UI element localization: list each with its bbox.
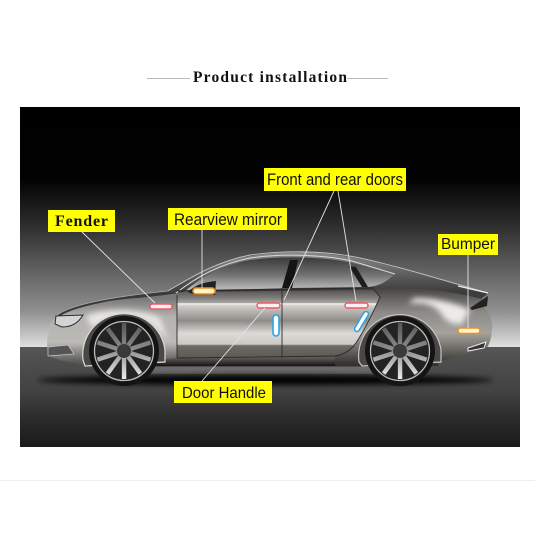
sticker: rear door edge blue inner [357, 314, 366, 329]
label: Fender [48, 210, 115, 232]
panel: car photo [20, 107, 520, 447]
front wheel arch [83, 314, 165, 366]
rear wheel arch [359, 315, 441, 366]
side windows [184, 257, 394, 292]
roof and rear deck [168, 252, 488, 300]
footer divider [0, 480, 535, 482]
label: Bumper: Bumper [441, 236, 496, 253]
fender highlight [86, 310, 168, 340]
rear quarter highlight [408, 298, 470, 324]
sticker: bumper amber [458, 328, 480, 334]
rear quarter panel [335, 289, 492, 366]
car shadow [37, 375, 493, 385]
headlight [55, 315, 83, 327]
tail bright spoiler [458, 286, 488, 293]
title: Product installation [193, 69, 347, 86]
mirror housing [188, 281, 216, 295]
floor highlight under car [150, 367, 380, 374]
roofline highlight [168, 252, 488, 293]
floor [20, 347, 520, 447]
rear wheel [365, 316, 435, 386]
front fog vent [48, 345, 74, 356]
label: Door Handle: Door Handle [182, 385, 266, 402]
car body silhouette [47, 252, 492, 366]
B pillar [282, 260, 298, 288]
label: Rearview mirror: Rearview mirror [174, 211, 282, 229]
label: Front and rear doors: Front and rear doors [267, 171, 403, 189]
backdrop [20, 107, 520, 347]
sticker: rear door edge blue [357, 314, 366, 329]
sticker: fender [150, 304, 172, 309]
window frame highlight [176, 255, 395, 293]
front wheel [89, 316, 159, 386]
hood dark band [57, 291, 178, 316]
door shut lines [177, 287, 380, 358]
label: Fender: Fender [55, 213, 108, 230]
sticker: front door edge blue [273, 315, 279, 336]
front fender panel [47, 294, 177, 366]
sticker: rear door handle [345, 303, 368, 308]
belt line [178, 288, 372, 291]
hood edge highlight [57, 291, 168, 315]
rear reflector [468, 342, 486, 351]
leader lines [82, 191, 468, 381]
car [47, 252, 492, 386]
C pillar [349, 266, 368, 287]
tail light [470, 296, 488, 310]
sticker: front door handle [257, 303, 280, 308]
sticker: mirror amber [193, 288, 215, 294]
